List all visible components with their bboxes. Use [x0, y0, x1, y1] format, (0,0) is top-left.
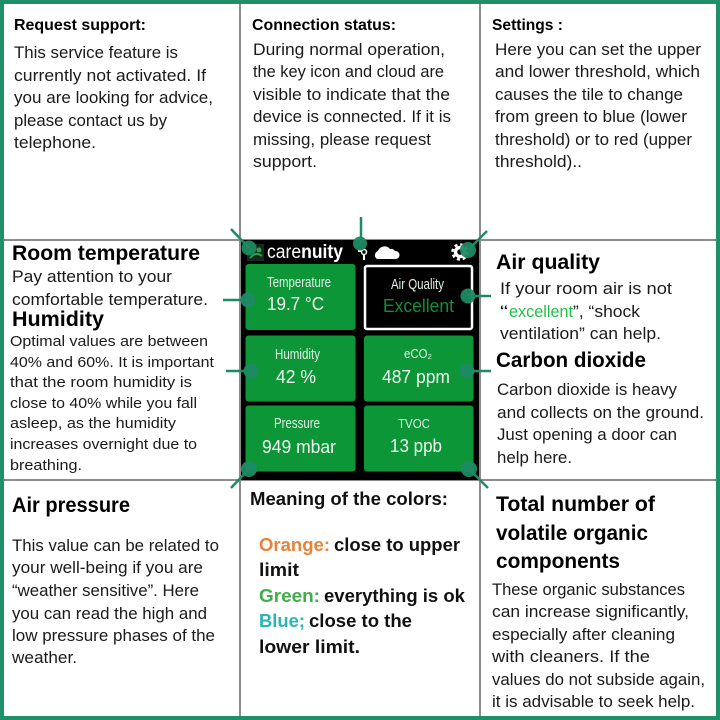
legend: orange — [259, 535, 460, 580]
legend: green: Green: — [259, 586, 320, 606]
text: room temperature body: comfortable temperature. — [12, 291, 208, 309]
text: room temperature body — [12, 268, 208, 309]
legend: orange: limit — [259, 560, 299, 580]
panel: request support — [14, 17, 213, 152]
text: volatile organic components body: values do not subside again, — [492, 671, 705, 689]
text: air pressure body: your well-being if you are — [12, 559, 203, 577]
tile: air quality: Excellent — [383, 296, 454, 316]
text: settings body: and lower threshold, which — [495, 63, 700, 81]
tile: pressure: Pressure — [274, 416, 320, 432]
heading: total number of volatile organic components — [496, 493, 656, 573]
tile: humidity: 42 % — [276, 367, 316, 387]
legend: orange: close to upper — [334, 535, 460, 555]
text: volatile organic components body — [491, 581, 705, 711]
tile: eCO2 — [364, 336, 474, 402]
text: volatile organic components body: can increase significantly, — [492, 603, 689, 621]
heading: settings: Settings : — [492, 17, 563, 34]
text: humidity body: breathing. — [10, 457, 82, 474]
tile: humidity — [246, 336, 356, 402]
pointer: connection status — [353, 217, 367, 250]
text: humidity body: Optimal values are between — [10, 333, 208, 350]
panel: meaning of the colors — [250, 489, 466, 657]
legend: blue — [259, 611, 412, 657]
heading: carbon dioxide: Carbon dioxide — [496, 349, 646, 372]
tile: pressure — [246, 406, 356, 472]
panel: settings — [492, 17, 702, 171]
text: carbon dioxide body: Just opening a door can — [497, 426, 677, 444]
tile: eCO2: 487 ppm — [382, 367, 450, 387]
text: settings body — [495, 41, 702, 171]
icon: carenuity logo mark — [247, 244, 264, 261]
panel: air quality and carbon dioxide — [496, 251, 704, 467]
heading: humidity: Humidity — [12, 308, 104, 331]
text: air pressure body: weather. — [11, 649, 77, 667]
tile: TVOC: 13 ppb — [390, 436, 442, 456]
text: air quality body: ”, “shock — [573, 303, 641, 321]
legend: blue: close to the — [309, 611, 412, 631]
icon: gear — [452, 244, 468, 260]
text: humidity body: increases overnight due to — [10, 436, 197, 453]
heading: connection status: Connection status: — [252, 17, 396, 34]
text: humidity body: 40% and 60%. It is important — [10, 354, 215, 371]
tile: pressure: 949 mbar — [262, 437, 336, 457]
text: request support body: you are looking for advice, — [14, 89, 213, 107]
text: connection status body: visible to indicate that the — [253, 86, 450, 104]
tile: TVOC — [364, 406, 474, 472]
text: request support body: please contact us by — [14, 112, 168, 130]
legend: green — [259, 586, 466, 606]
text: air pressure body: “weather sensitive”. Here — [12, 582, 199, 600]
text: request support body — [14, 44, 213, 152]
text: settings body: from green to blue (lower — [495, 108, 688, 126]
pointer: air quality — [460, 288, 491, 304]
pointer: carbon dioxide — [460, 364, 491, 378]
text: carbon dioxide body: Carbon dioxide is heavy — [497, 381, 678, 399]
panel: air pressure — [11, 494, 219, 667]
text: connection status body: During normal operation, — [253, 41, 445, 59]
tile: TVOC: TVOC — [398, 416, 430, 431]
tile: air quality: Air Quality — [391, 277, 445, 293]
text: air pressure body: This value can be related to — [12, 537, 219, 555]
tile: temperature: Temperature — [267, 275, 331, 291]
text: connection status body: missing, please request — [253, 131, 431, 149]
icon: key — [358, 250, 366, 260]
device screen — [241, 240, 479, 480]
text: request support body: currently not activated. If — [14, 67, 206, 85]
heading: total number of volatile organic components: Total number of — [496, 493, 656, 516]
text: connection status body: device is connected. If it is — [253, 108, 451, 126]
text: request support body: This service feature is — [14, 44, 178, 62]
text: carbon dioxide body — [497, 381, 704, 467]
text: volatile organic components body: with cleaners. If the — [491, 648, 650, 666]
text: connection status body: the key icon and cloud are — [253, 63, 444, 81]
text: air pressure body: low pressure phases of the — [12, 627, 215, 645]
legend: blue: Blue; — [259, 611, 305, 631]
text: settings body: Here you can set the upper — [495, 41, 702, 59]
legend: blue: lower limit. — [259, 637, 360, 657]
text: humidity body — [10, 333, 215, 474]
text: humidity body: asleep, as the humidity — [10, 415, 177, 432]
text: request support body: telephone. — [14, 134, 96, 152]
text: volatile organic components body: especially after cleaning — [492, 626, 675, 644]
text: air quality body — [500, 280, 672, 343]
text: air quality body: If your room air is not — [500, 280, 672, 298]
tile: eCO2: eCO₂ — [404, 346, 432, 361]
tile: temperature: 19.7 °C — [267, 294, 324, 314]
pointer: air pressure — [231, 461, 257, 488]
text: volatile organic components body: it is advisable to seek help. — [492, 693, 695, 711]
pointer: settings — [460, 231, 487, 258]
logo text: carenuity — [267, 242, 343, 263]
icon: cloud — [375, 246, 400, 259]
text: connection status body: support. — [253, 153, 317, 171]
pointer: request support — [231, 229, 256, 256]
text: humidity body: that the room humidity is — [10, 374, 192, 391]
text: air pressure body — [11, 537, 219, 667]
text: connection status body — [253, 41, 451, 171]
text: humidity body: close to 40% while you fall — [10, 395, 197, 412]
text: air quality body: excellent — [509, 303, 573, 321]
heading: air quality: Air quality — [496, 251, 600, 274]
heading: meaning of the colors: Meaning of the colors: — [250, 489, 448, 509]
panel: room temperature and humidity — [10, 242, 215, 474]
heading: total number of volatile organic components: components — [496, 550, 620, 573]
tile: air quality — [365, 266, 472, 329]
pointer: room temperature — [223, 292, 256, 308]
heading: room temperature: Room temperature — [12, 242, 200, 265]
text: volatile organic components body: These organic substances — [492, 581, 685, 599]
panel: total volatile organic components — [491, 493, 705, 711]
text: air quality body: ventilation” can help. — [500, 325, 661, 343]
text: settings body: causes the tile to change — [495, 86, 683, 104]
tile: temperature — [246, 264, 356, 330]
text: carbon dioxide body: and collects on the ground. — [497, 404, 704, 422]
legend: orange: Orange: — [259, 535, 330, 555]
heading: air pressure: Air pressure — [12, 494, 130, 517]
text: room temperature body: Pay attention to your — [12, 268, 173, 286]
heading: total number of volatile organic components: volatile organic — [496, 522, 648, 545]
text: air pressure body: you can read the high and — [12, 605, 207, 623]
legend: green: everything is ok — [324, 586, 466, 606]
panel: connection status — [252, 17, 451, 171]
text: carbon dioxide body: help here. — [497, 449, 572, 467]
pointer: humidity — [226, 364, 258, 378]
tile: humidity: Humidity — [275, 347, 321, 363]
heading: request support: Request support: — [14, 17, 146, 34]
text: settings body: threshold).. — [495, 153, 582, 171]
text: air quality body: “ — [500, 303, 508, 321]
text: settings body: threshold) or to red (upper — [495, 131, 693, 149]
pointer: volatile organic components — [461, 461, 488, 488]
